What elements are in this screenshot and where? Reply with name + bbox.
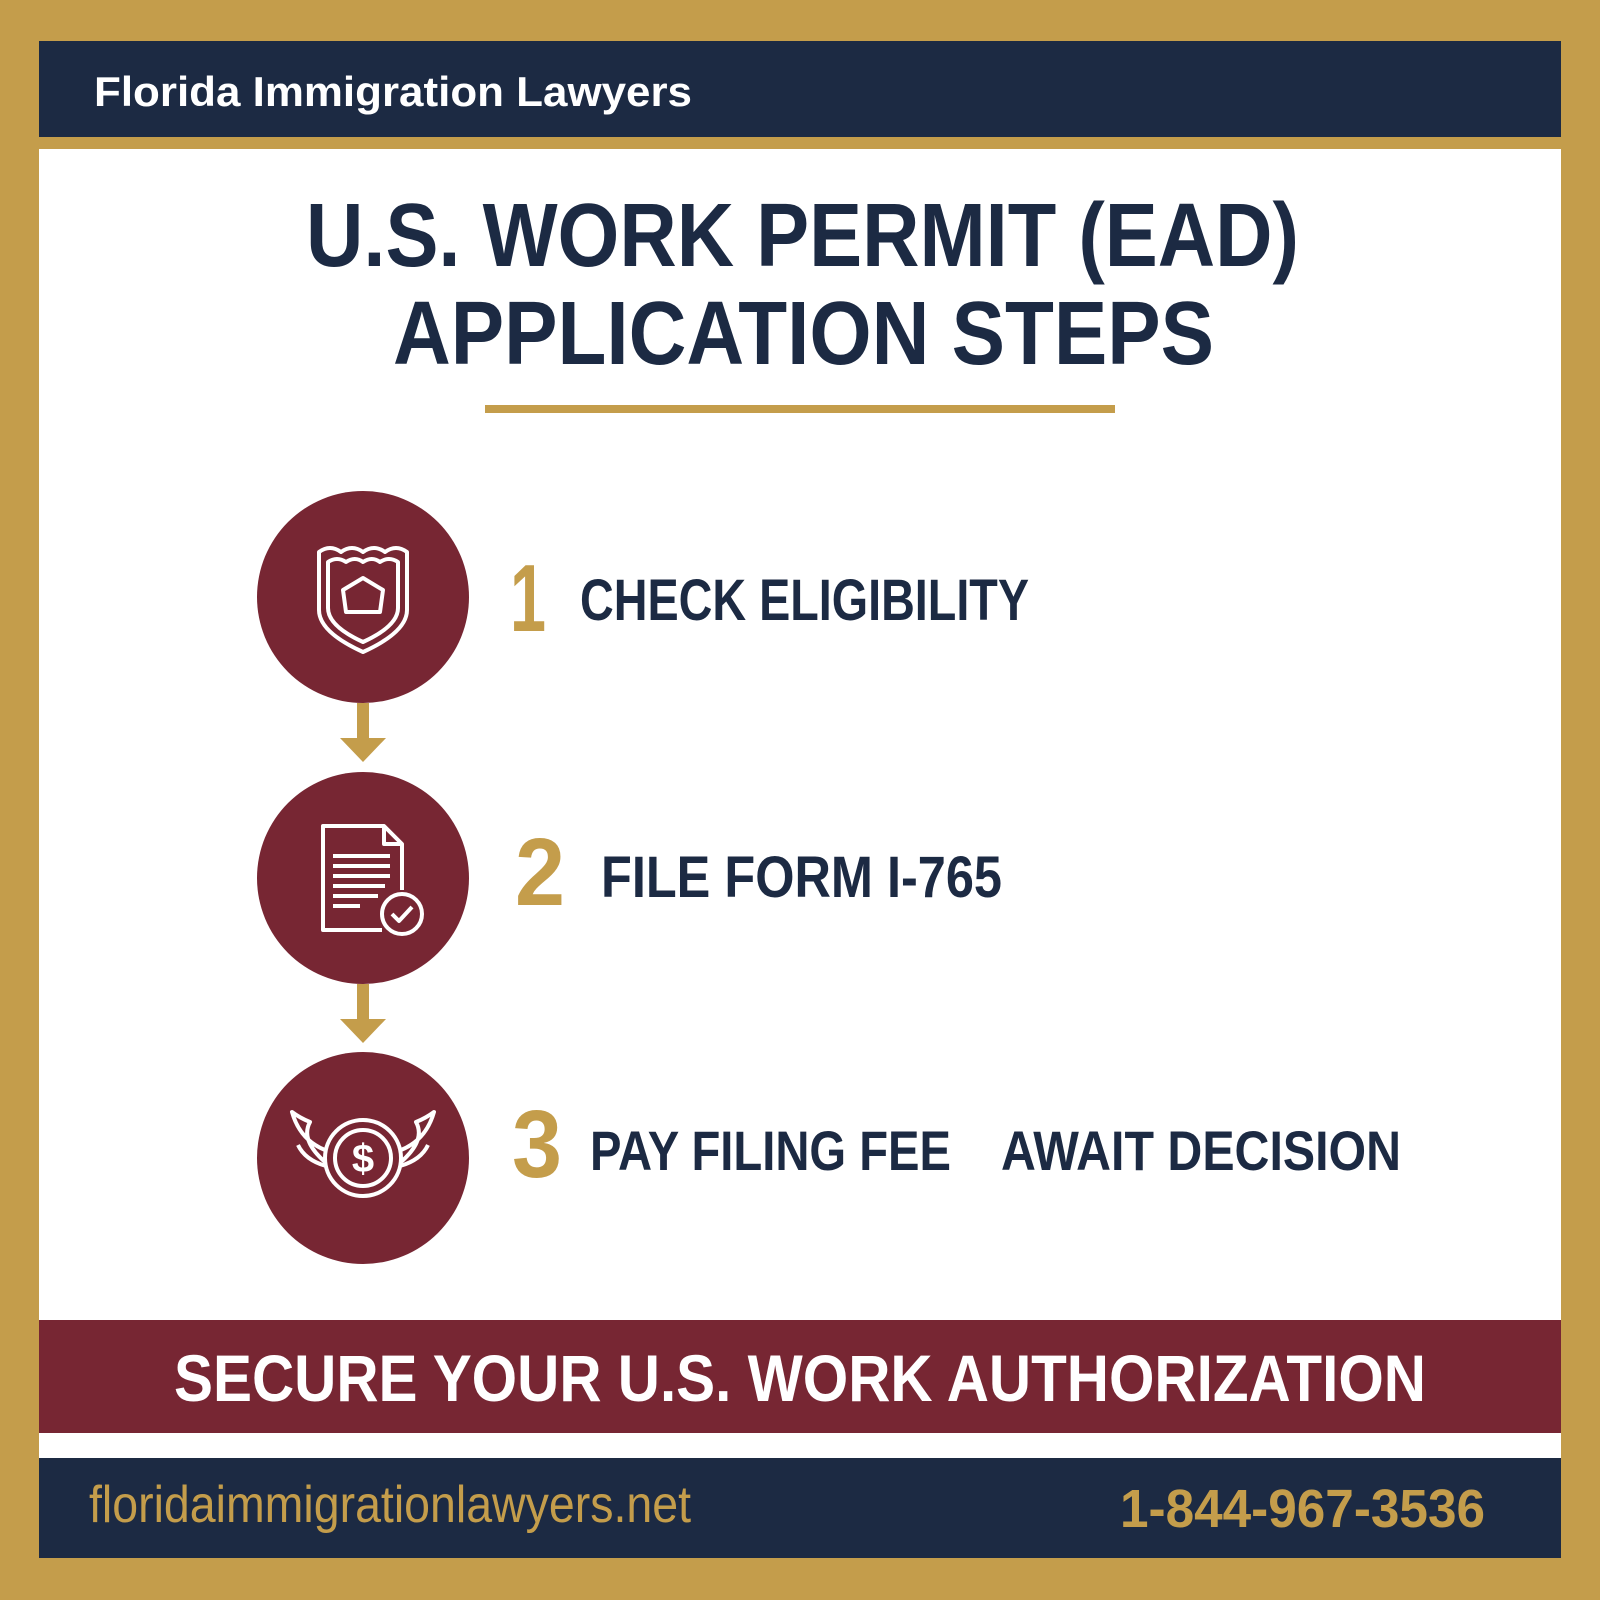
banner	[39, 1320, 1561, 1433]
title underline	[485, 405, 1115, 413]
title	[306, 186, 1299, 384]
step 1	[257, 491, 1029, 703]
step 3	[257, 1052, 1401, 1264]
step 1 label: CHECK ELIGIBILITY	[580, 568, 1029, 633]
title: APPLICATION STEPS	[393, 284, 1214, 384]
header text: Florida Immigration Lawyers	[94, 68, 692, 115]
header bar	[39, 41, 1561, 137]
icon: document with check	[257, 772, 469, 984]
step 4 label: AWAIT DECISION	[1001, 1119, 1401, 1182]
arrow 2	[340, 984, 386, 1043]
phone: 1-844-967-3536	[1120, 1479, 1485, 1539]
step 3 label: PAY FILING FEE	[590, 1119, 951, 1182]
icon: winged coin: $	[352, 1137, 374, 1181]
step 2 label: FILE FORM I-765	[601, 845, 1002, 910]
title: U.S. WORK PERMIT (EAD)	[306, 186, 1299, 286]
number 1: 1	[510, 545, 546, 652]
number 3: 3	[512, 1091, 562, 1198]
banner text: SECURE YOUR U.S. WORK AUTHORIZATION	[174, 1341, 1426, 1415]
step 2	[257, 772, 1002, 984]
arrow 1	[340, 703, 386, 762]
icon: winged coin	[257, 1052, 469, 1264]
icon: shield	[257, 491, 469, 703]
footer	[39, 1458, 1561, 1558]
number 2: 2	[515, 819, 565, 926]
website: floridaimmigrationlawyers.net	[89, 1476, 691, 1534]
